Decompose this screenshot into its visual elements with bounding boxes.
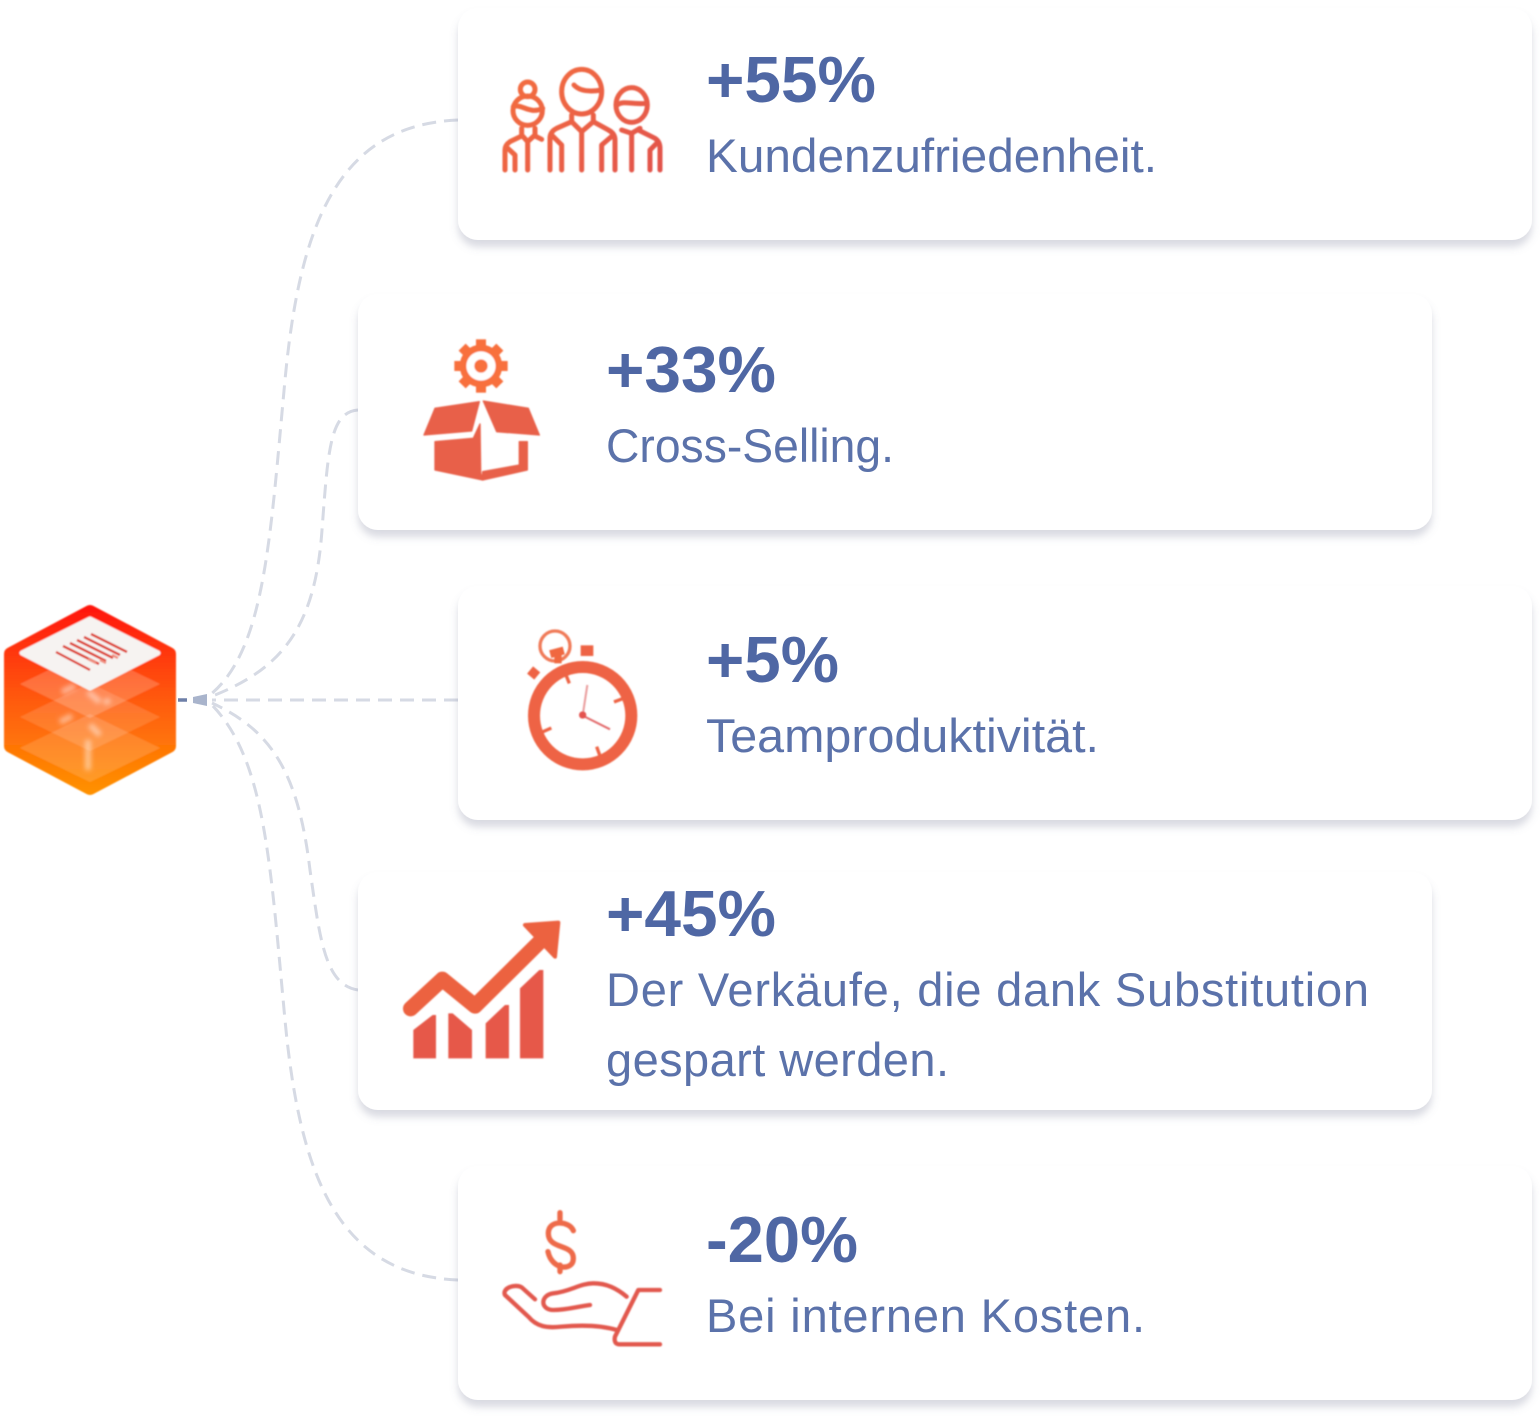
label: Der Verkäufe, die dank Substitution gespart werden: Der Verkäufe, die dank Substitution <box>606 963 1369 1016</box>
panel: Kosten <box>458 1166 1532 1400</box>
icon: hand with dollar <box>504 1213 660 1344</box>
label: Bei internen Kosten: Bei internen Kosten. <box>706 1289 1145 1342</box>
icon: central hexagon layers <box>11 612 169 788</box>
connectors <box>178 120 458 1280</box>
label: Kundenzufriedenheit: Kundenzufriedenheit. <box>706 129 1157 182</box>
panel: Verkäufe <box>358 872 1432 1110</box>
heading: +5%: +5% <box>706 623 839 696</box>
panel: Teamproduktivität <box>458 586 1532 820</box>
icon: growth chart <box>411 923 558 1058</box>
icon: stopwatch <box>527 631 631 764</box>
heading: +55%: +55% <box>706 43 876 116</box>
label: Der Verkäufe, die dank Substitution gespart werden <box>606 963 1369 1086</box>
label: Cross-Selling: Cross-Selling. <box>606 419 894 472</box>
heading: -20%: -20% <box>706 1203 858 1276</box>
panel: Kundenzufriedenheit <box>458 8 1532 240</box>
label: Teamproduktivität: Teamproduktivität. <box>706 709 1099 762</box>
heading: +33%: +33% <box>606 333 776 406</box>
label: Der Verkäufe, die dank Substitution gespart werden: gespart werden. <box>606 1033 949 1086</box>
heading: +45%: +45% <box>606 877 776 950</box>
icon: gear and box <box>424 339 539 480</box>
icon: people <box>505 69 660 170</box>
panel: Cross-Selling <box>358 294 1432 530</box>
